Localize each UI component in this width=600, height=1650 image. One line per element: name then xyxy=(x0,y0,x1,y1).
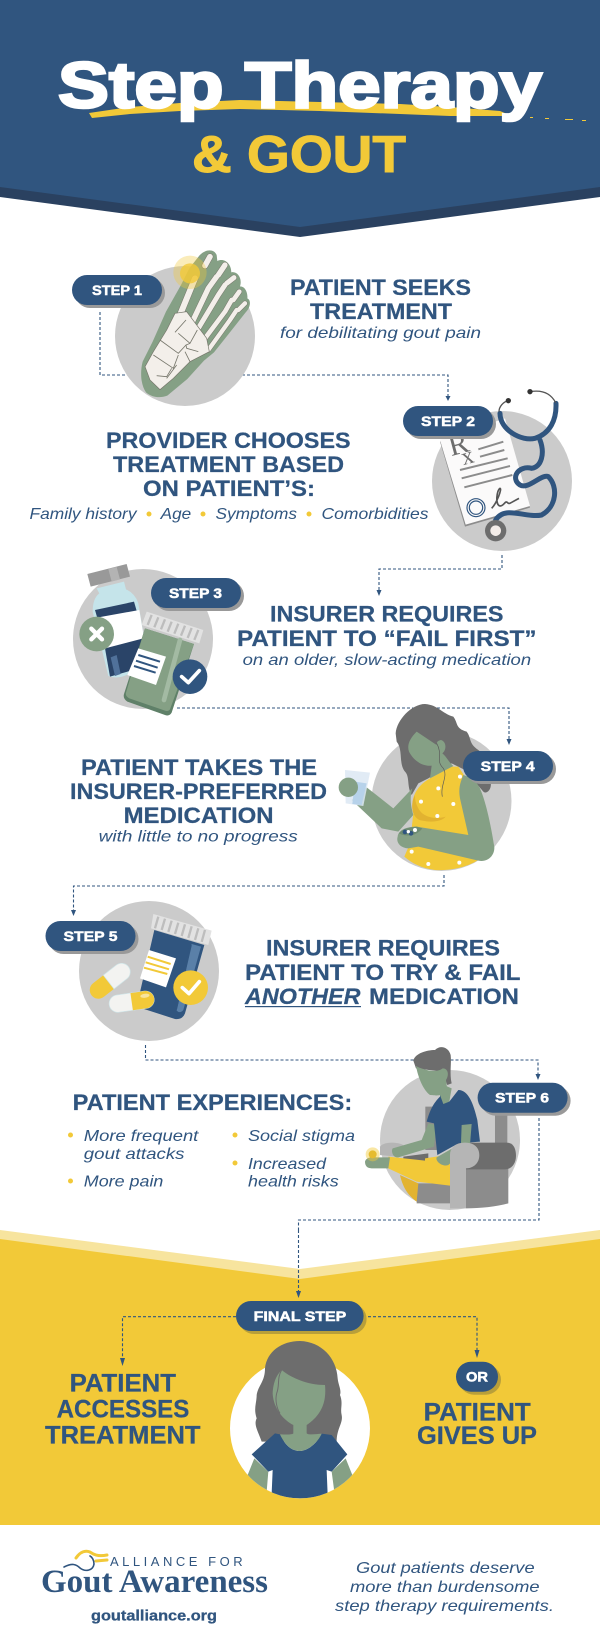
step 1 badge: STEP 1 xyxy=(92,282,142,298)
step 4 badge xyxy=(463,751,556,784)
step 4 text: PATIENT TAKES THE xyxy=(81,755,317,780)
step 3 badge: STEP 3 xyxy=(169,585,222,601)
step 3 text xyxy=(237,602,536,669)
step 6 text xyxy=(68,1090,355,1191)
step 4 illustration: woman taking medication xyxy=(339,704,512,871)
step 3 text: INSURER REQUIRES xyxy=(270,602,504,627)
step 2 text: PROVIDER CHOOSES xyxy=(106,428,350,453)
step 2 badge xyxy=(403,406,496,439)
final step connectors xyxy=(120,1230,480,1366)
step 3 text: on an older, slow-acting medication xyxy=(243,652,531,669)
step 5 illustration: pill bottle and capsules xyxy=(79,901,219,1041)
step 6 text: More frequent xyxy=(84,1128,199,1145)
footer message xyxy=(335,1560,554,1615)
footer message: more than burdensome xyxy=(350,1579,540,1596)
step 5 badge xyxy=(46,921,138,954)
step 5 text xyxy=(244,936,521,1009)
final step yellow panel xyxy=(0,1230,600,1525)
footer logo xyxy=(41,1551,268,1625)
step 4 text xyxy=(70,755,327,846)
outcome: patient gives up xyxy=(417,1399,537,1450)
step 2 text xyxy=(30,428,428,523)
title: & GOUT xyxy=(192,126,406,184)
step 6 text: Social stigma xyxy=(248,1128,355,1145)
step 4 text: with little to no progress xyxy=(99,829,298,846)
footer logo: goutalliance.org xyxy=(91,1609,217,1625)
outcome: patient accesses treatment xyxy=(45,1370,200,1450)
step 4 badge: STEP 4 xyxy=(481,758,535,774)
footer message: Gout patients deserve xyxy=(356,1560,535,1577)
final step illustration: patient portrait xyxy=(230,1341,370,1499)
footer logo: Gout Awareness xyxy=(41,1564,268,1600)
step 6 badge: STEP 6 xyxy=(495,1090,549,1106)
step 4 text: MEDICATION xyxy=(124,803,274,828)
step 2 badge: STEP 2 xyxy=(421,413,475,429)
step 2 text: Age xyxy=(160,506,191,523)
step 5 text: MEDICATION xyxy=(369,984,519,1009)
step 3 text: PATIENT TO “FAIL FIRST” xyxy=(237,626,536,651)
outcome: patient accesses treatment: TREATMENT xyxy=(45,1422,200,1450)
title: Step Therapy xyxy=(58,48,542,122)
header banner xyxy=(0,0,600,237)
step 6 text: gout attacks xyxy=(84,1146,184,1163)
step 2 text: Family history xyxy=(30,506,138,523)
outcome: patient gives up: PATIENT xyxy=(424,1399,531,1427)
step 3 illustration: two medication bottles xyxy=(73,564,213,715)
step 5 text: PATIENT TO TRY & FAIL xyxy=(245,960,521,985)
step 1 badge xyxy=(72,275,165,308)
footer message: step therapy requirements. xyxy=(335,1598,554,1615)
or badge xyxy=(456,1362,501,1395)
step 2 text: Symptoms xyxy=(216,506,297,523)
step 2 text: Comorbidities xyxy=(322,506,428,523)
title xyxy=(58,48,542,184)
step 4 text: INSURER-PREFERRED xyxy=(70,779,327,804)
final step badge xyxy=(236,1301,367,1334)
step 1 illustration: foot skeleton xyxy=(115,250,255,406)
step 6 illustration: patient in armchair xyxy=(365,1047,520,1210)
outcome: patient accesses treatment: PATIENT xyxy=(70,1370,176,1398)
step 5 text: ANOTHER xyxy=(244,984,361,1009)
step 2 illustration: prescription and stethoscope xyxy=(432,389,572,551)
step 2 text: ON PATIENT’S: xyxy=(143,476,315,501)
step 6 text: More pain xyxy=(84,1174,164,1191)
step 6 badge xyxy=(478,1083,571,1116)
step 1 text: TREATMENT xyxy=(310,299,452,324)
step 5 badge: STEP 5 xyxy=(64,928,118,944)
step 1 text: PATIENT SEEKS xyxy=(290,275,471,300)
step 2 text: TREATMENT BASED xyxy=(113,452,344,477)
step 2 illustration: prescription and stethoscope: x xyxy=(458,443,477,471)
outcome: patient gives up: GIVES UP xyxy=(417,1422,537,1450)
step 2 illustration: prescription and stethoscope: R xyxy=(444,426,472,463)
step 5 text: INSURER REQUIRES xyxy=(266,936,500,961)
or badge: OR xyxy=(466,1369,488,1385)
step 1 text xyxy=(280,275,481,342)
outcome: patient accesses treatment: ACCESSES xyxy=(57,1396,189,1424)
step 3 badge xyxy=(151,578,244,611)
step 6 text: health risks xyxy=(248,1174,339,1191)
final step badge: FINAL STEP xyxy=(254,1308,346,1324)
step 6 text: PATIENT EXPERIENCES: xyxy=(73,1090,352,1115)
footer logo: ALLIANCE FOR xyxy=(110,1554,243,1569)
title brush stroke xyxy=(89,100,586,121)
step 1 text: for debilitating gout pain xyxy=(280,325,481,342)
step 6 text: Increased xyxy=(248,1156,327,1173)
connector arrows between steps xyxy=(71,312,540,1230)
